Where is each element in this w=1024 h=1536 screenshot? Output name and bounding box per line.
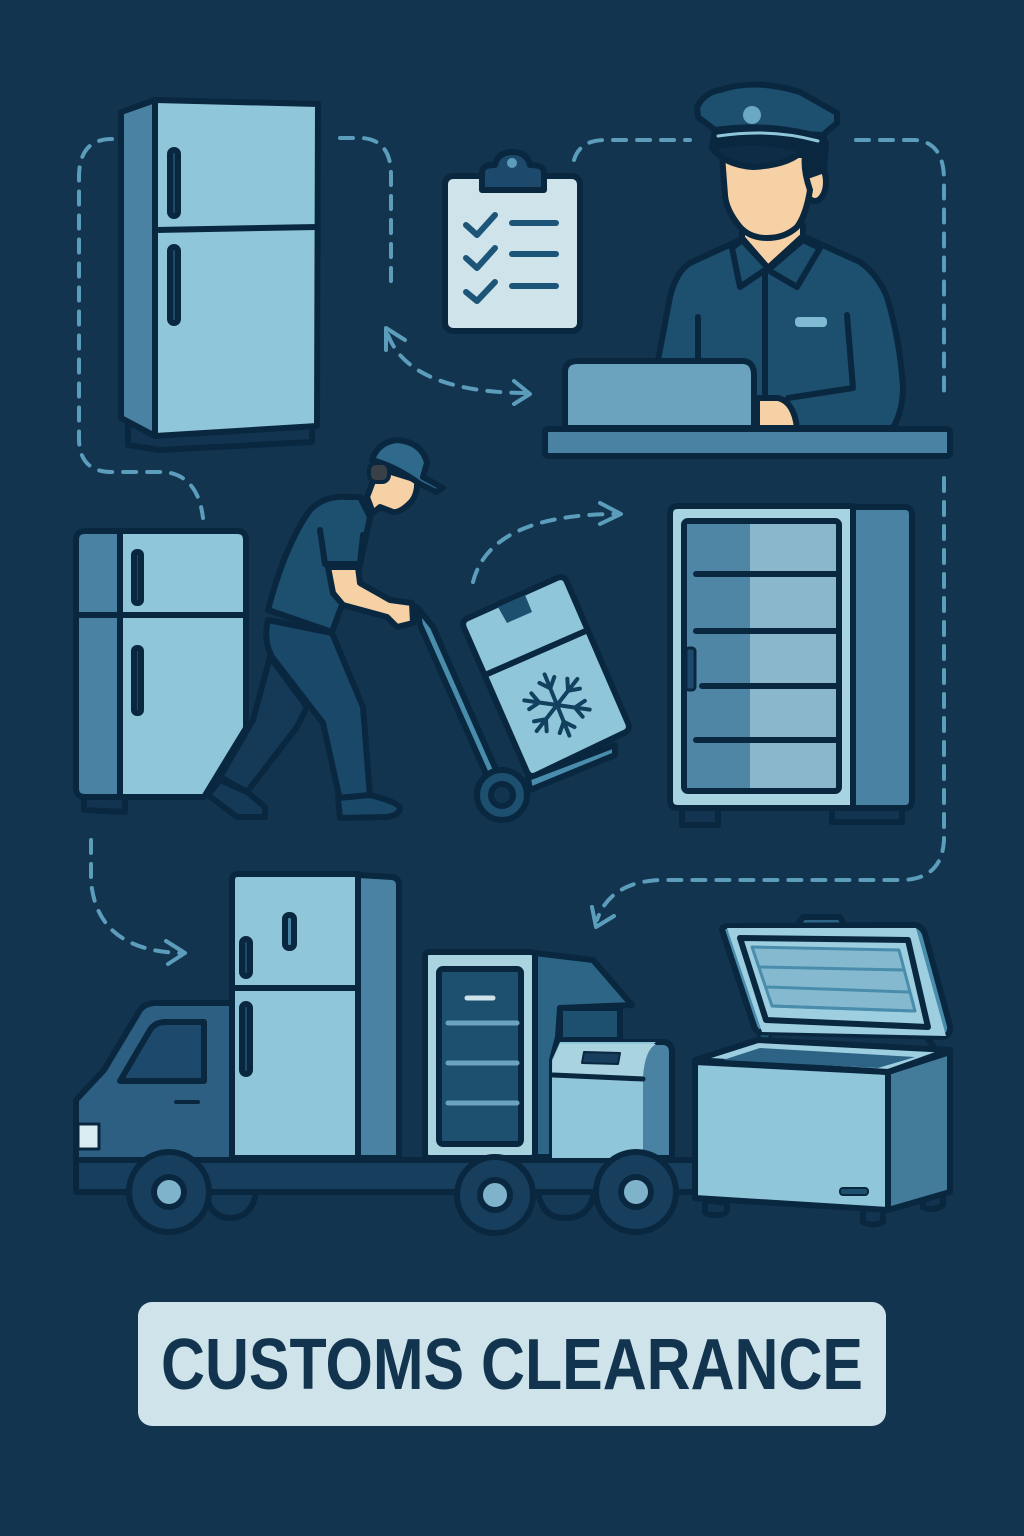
- dashed flow arrows: [79, 138, 944, 964]
- customs officer: [658, 84, 903, 428]
- large refrigerator: [121, 100, 318, 450]
- small refrigerator: [76, 531, 246, 812]
- display cooler: [670, 506, 912, 825]
- fridge on truck: [232, 874, 399, 1158]
- hand truck with freezer box: [417, 577, 629, 820]
- cooler on truck: [425, 952, 632, 1158]
- customs desk and laptop: [545, 361, 950, 456]
- truck wheels: [129, 1152, 676, 1233]
- chest freezer: [695, 917, 950, 1224]
- delivery worker: [208, 440, 443, 818]
- title banner: CUSTOMS CLEARANCE: [161, 1325, 863, 1405]
- small appliance on truck: [552, 1042, 672, 1158]
- delivery truck: [76, 1003, 698, 1218]
- title banner: [138, 1302, 886, 1426]
- clipboard checklist: [445, 152, 580, 331]
